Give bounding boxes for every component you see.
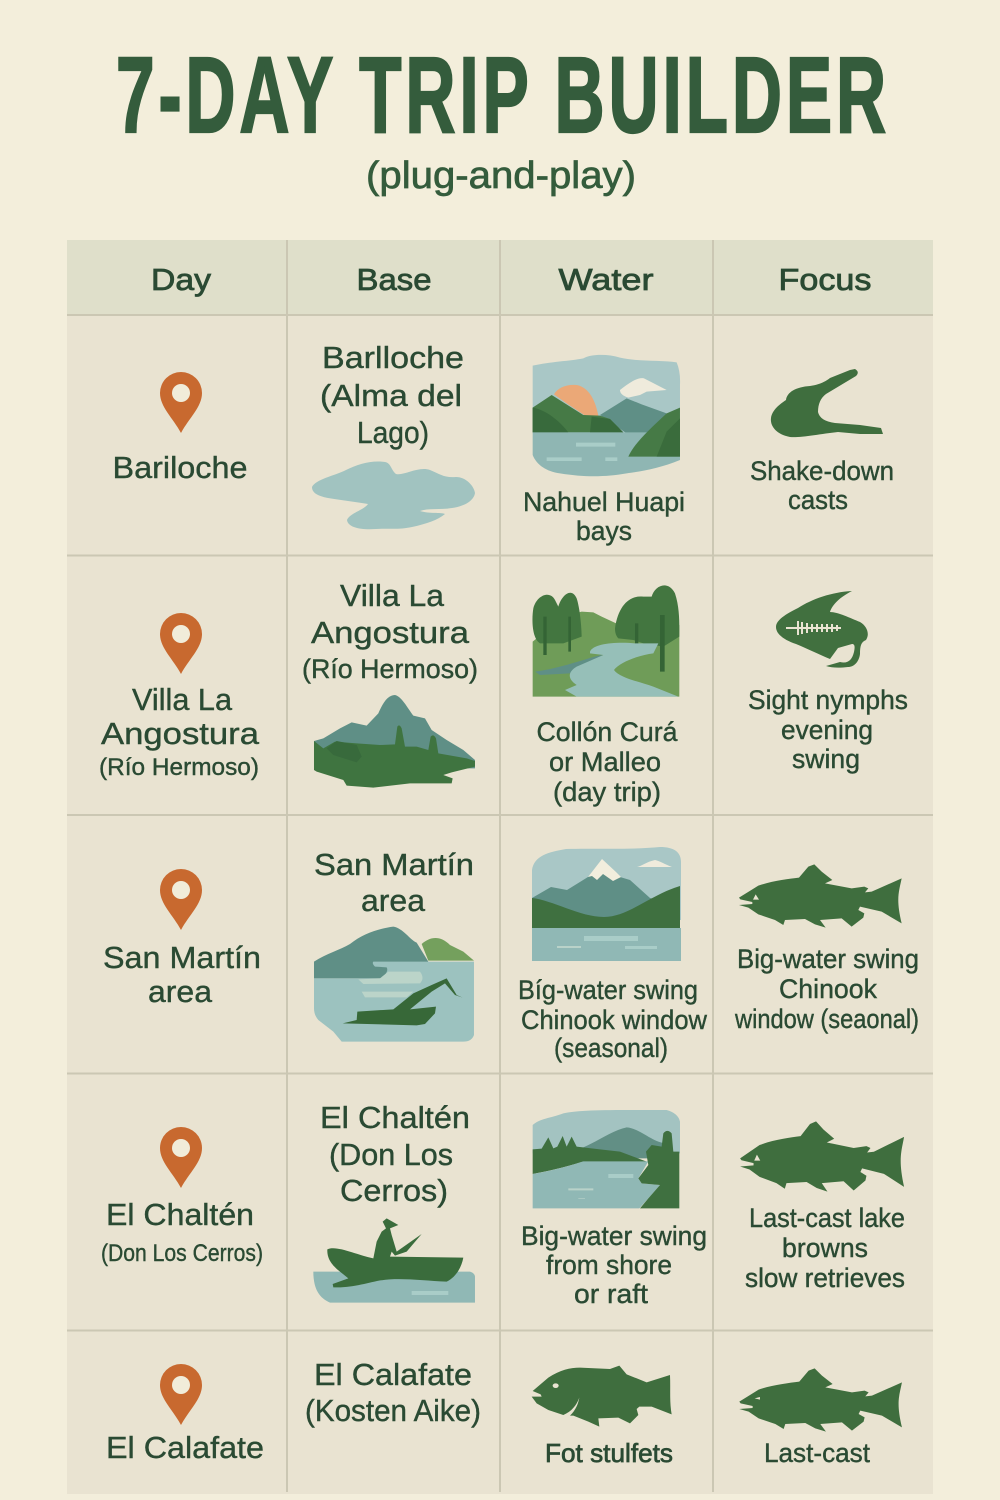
focus cell: Last-cast xyxy=(739,1368,902,1468)
icon: casting silhouette xyxy=(771,369,883,437)
illustration: lake with mountains and sun xyxy=(533,355,680,476)
water cell: Collón Curá: (day trip) xyxy=(553,777,661,807)
illustration: boat on lake xyxy=(314,927,474,1042)
day cell: San Martín: San Martín xyxy=(103,940,261,975)
focus cell: Last-cast lake browns: Last-cast lake xyxy=(749,1203,905,1233)
day cell: El Chaltén: El Chaltén xyxy=(106,1197,254,1232)
icon: trout silhouette xyxy=(739,1368,902,1432)
base cell: El Chaltén: Cerros) xyxy=(340,1173,448,1208)
base cell: Bariloche: Barlloche xyxy=(322,340,464,375)
icon: map pin xyxy=(160,613,202,674)
base cell: El Calafate xyxy=(305,1357,481,1428)
header: Focus: Focus xyxy=(778,262,872,297)
focus cell: Last-cast: Last-cast xyxy=(764,1438,870,1468)
focus cell: Shake-down casts: Shake-down xyxy=(750,456,894,486)
base cell: Bariloche: (Alma del xyxy=(320,378,462,413)
focus cell: Last-cast lake browns: browns xyxy=(782,1233,868,1263)
header: Day: Day xyxy=(151,262,212,297)
water cell: Big-water swing Chinook window: Chinook window xyxy=(521,1005,707,1035)
day cell: Bariloche: Bariloche xyxy=(112,450,248,485)
day cell: San Martín: area xyxy=(148,974,213,1009)
water cell: Collón Curá: or Malleo xyxy=(549,747,661,777)
day cell: El Chaltén xyxy=(101,1127,263,1267)
day cell: San Martín xyxy=(103,869,261,1009)
header: Water: Water xyxy=(558,262,654,297)
icon: mountain silhouette xyxy=(314,695,475,788)
day cell: Bariloche xyxy=(112,372,248,485)
row 2: Villa La Angostura xyxy=(99,578,908,807)
icon: fly with hook xyxy=(776,591,868,668)
focus cell: Sight nymphs: swing xyxy=(792,744,860,774)
illustration: river with trees xyxy=(532,585,679,697)
day cell: El Chaltén: (Don Los Cerros) xyxy=(101,1240,263,1267)
base cell: El Chaltén: El Chaltén xyxy=(320,1100,470,1135)
row 1: Bariloche xyxy=(112,340,894,546)
row 4: El Chaltén xyxy=(101,1100,905,1309)
day cell: Villa La Angostura: Angostura xyxy=(101,716,260,751)
base cell: Villa La Angostura xyxy=(302,578,478,788)
water cell: Nahuel Huapi: bays xyxy=(576,516,632,546)
water cell: Big-water swing Chinook window: Bíg-water swing xyxy=(518,975,698,1005)
icon: fish silhouette xyxy=(532,1366,672,1427)
day cell: El Calafate: El Calafate xyxy=(106,1430,264,1465)
focus cell: Big-water swing Chinook: window (seaonal) xyxy=(734,1004,919,1034)
icon: map pin xyxy=(160,372,202,433)
water cell: Big-water swing Chinook window xyxy=(518,847,707,1063)
water cell: Nahuel Huapi xyxy=(523,355,685,546)
subtitle: (plug-and-play) xyxy=(366,155,636,197)
base cell: San Martín: San Martín xyxy=(314,847,474,882)
focus cell: Shake-down casts: casts xyxy=(788,485,848,515)
base cell: Villa La Angostura: Villa La xyxy=(340,578,445,613)
water cell: Fot stulfets: Fot stulfets xyxy=(545,1438,673,1468)
row 5: El Calafate xyxy=(106,1357,902,1468)
icon: trout silhouette xyxy=(739,864,902,928)
focus cell: Sight nymphs xyxy=(748,591,908,774)
base cell: El Calafate: El Calafate xyxy=(314,1357,472,1392)
water cell: Big-water swing from shore xyxy=(521,1110,707,1309)
illustration: angler in canoe xyxy=(313,1218,475,1303)
base cell: El Chaltén: (Don Los xyxy=(329,1137,453,1172)
base cell: El Calafate: (Kosten Aike) xyxy=(305,1393,481,1428)
base cell: Villa La Angostura: Angostura xyxy=(311,615,470,650)
water cell: Big-water swing Chinook window: (seasonal) xyxy=(554,1033,668,1063)
illustration: snow peak and lake xyxy=(532,847,681,961)
day cell: Villa La Angostura: Villa La xyxy=(132,682,233,717)
focus cell: Sight nymphs: Sight nymphs xyxy=(748,685,908,715)
base cell: Bariloche xyxy=(312,340,475,529)
icon: lake outline xyxy=(312,461,475,529)
table panel xyxy=(67,240,933,1494)
icon: trout silhouette xyxy=(740,1121,904,1192)
focus cell: Last-cast lake browns: slow retrieves xyxy=(745,1263,905,1293)
base cell: San Martín xyxy=(314,847,474,1042)
day cell: El Calafate xyxy=(106,1364,264,1465)
base cell: El Chaltén xyxy=(313,1100,475,1303)
illustration: lake shore with pines xyxy=(533,1110,680,1208)
focus cell: Sight nymphs: evening xyxy=(781,715,873,745)
water cell: Collón Curá xyxy=(532,585,679,807)
base cell: Bariloche: Lago) xyxy=(357,415,429,450)
header: Base: Base xyxy=(356,262,432,297)
focus cell: Big-water swing Chinook: Big-water swing xyxy=(737,944,919,974)
focus cell: Big-water swing Chinook xyxy=(734,864,919,1034)
base cell: Villa La Angostura: (Río Hermoso) xyxy=(302,654,478,684)
icon: map pin xyxy=(160,869,202,930)
water cell: Big-water swing from shore: from shore xyxy=(546,1250,672,1280)
icon: map pin xyxy=(160,1364,202,1425)
day cell: Villa La Angostura: (Río Hermoso) xyxy=(99,754,259,781)
base cell: San Martín: area xyxy=(361,883,426,918)
focus cell: Last-cast lake browns xyxy=(740,1121,905,1293)
focus cell: Big-water swing Chinook: Chinook xyxy=(779,974,877,1004)
water cell: Big-water swing from shore: or raft xyxy=(574,1279,649,1309)
row 3: San Martín xyxy=(103,847,919,1063)
water cell: Fot stulfets xyxy=(532,1366,673,1468)
focus cell: Shake-down casts xyxy=(750,369,894,515)
header row xyxy=(151,262,872,297)
day cell: Villa La Angostura xyxy=(99,613,260,781)
icon: map pin xyxy=(160,1127,202,1188)
water cell: Big-water swing from shore: Big-water swing xyxy=(521,1221,707,1251)
water cell: Nahuel Huapi: Nahuel Huapi xyxy=(523,487,685,517)
water cell: Collón Curá: Collón Curá xyxy=(536,717,678,747)
